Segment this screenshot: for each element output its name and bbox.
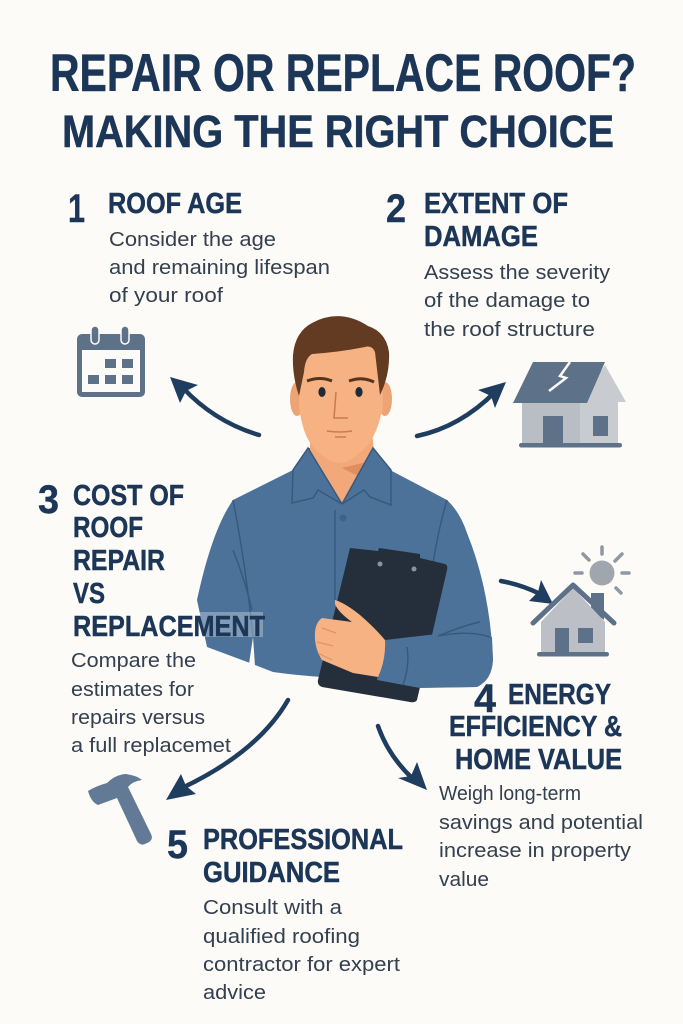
section 5: professional guidance — [167, 823, 403, 1004]
section 3: cost of repair vs replacement: COST OF — [73, 480, 184, 512]
section 5: professional guidance: PROFESSIONAL — [203, 824, 403, 856]
section 3: cost of repair vs replacement: ROOF — [73, 512, 143, 544]
arrow to calendar — [170, 377, 259, 435]
nose and mouth — [327, 392, 352, 437]
clipboard — [318, 548, 447, 702]
section 5: professional guidance: qualified roofing — [203, 926, 360, 948]
section 2: extent of damage: Assess the severity — [424, 262, 610, 284]
arrow to house — [417, 382, 506, 436]
section 3: cost of repair vs replacement: estimates for — [71, 679, 194, 701]
section 4: energy efficiency and home value: 4 — [474, 677, 497, 721]
icon: hammer — [88, 774, 152, 845]
section 3: cost of repair vs replacement: a full replacemet — [71, 735, 231, 757]
eyes — [318, 387, 326, 397]
section 2: extent of damage: EXTENT OF — [424, 188, 568, 220]
section 3: cost of repair vs replacement — [38, 478, 265, 757]
section 3: cost of repair vs replacement: Compare the — [71, 650, 196, 672]
section 1: roof age: ROOF AGE — [108, 188, 242, 220]
section 3: cost of repair vs replacement: repairs versus — [71, 707, 205, 729]
section 3: cost of repair vs replacement: 3 — [38, 478, 59, 522]
hair — [293, 316, 389, 396]
section 1: roof age: 1 — [68, 187, 85, 231]
section 3: cost of repair vs replacement: REPAIR — [73, 545, 165, 577]
section 4: energy efficiency and home value: savings and potential — [439, 812, 643, 834]
neck — [310, 430, 375, 504]
section 4: energy efficiency and home value: value — [439, 869, 489, 891]
face — [299, 345, 383, 463]
title: MAKING THE RIGHT CHOICE — [62, 106, 614, 157]
section 4: energy efficiency and home value: increase in property — [439, 840, 631, 862]
arrow to hammer — [166, 700, 288, 800]
section 5: professional guidance: 5 — [167, 823, 188, 867]
section 5: professional guidance: contractor for expert — [203, 954, 400, 976]
shirt notch — [249, 637, 255, 666]
person illustration — [197, 316, 493, 702]
collar — [292, 448, 342, 504]
shirt — [197, 448, 493, 688]
section 1: roof age: and remaining lifespan — [109, 257, 330, 279]
section 5: professional guidance: Consult with a — [203, 897, 343, 919]
sleeve — [377, 634, 493, 688]
section 1: roof age — [68, 187, 330, 307]
title — [50, 44, 636, 157]
section 2: extent of damage: 2 — [386, 187, 406, 231]
section 2: extent of damage: of the damage to — [424, 290, 590, 312]
sleeve overlap highlight — [197, 612, 263, 637]
section 5: professional guidance: GUIDANCE — [203, 857, 340, 889]
section 4: energy efficiency and home value: ENERGY — [508, 679, 611, 711]
section 4: energy efficiency and home value: Weigh long-term — [439, 783, 581, 805]
section 2: extent of damage: DAMAGE — [424, 221, 538, 253]
section 4: energy efficiency and home value — [439, 677, 643, 891]
ears — [290, 382, 304, 416]
section 5: professional guidance: advice — [203, 982, 266, 1004]
section 2: extent of damage — [386, 187, 610, 341]
brows — [307, 378, 374, 382]
section 1: roof age: of your roof — [109, 285, 223, 307]
section 1: roof age: Consider the age — [109, 229, 276, 251]
arrow to value text — [378, 726, 427, 790]
icon: damaged house — [513, 362, 626, 448]
arrow to energy house — [501, 580, 553, 604]
icon: energy house with sun — [533, 547, 629, 656]
hand — [315, 600, 385, 677]
section 3: cost of repair vs replacement: REPLACEMENT — [73, 611, 265, 643]
section 2: extent of damage: the roof structure — [424, 319, 595, 341]
section 3: cost of repair vs replacement: VS — [73, 578, 105, 610]
section 4: energy efficiency and home value: EFFICIENCY & — [449, 711, 622, 743]
icon: calendar — [77, 326, 145, 397]
section 4: energy efficiency and home value: HOME VALUE — [455, 744, 622, 776]
